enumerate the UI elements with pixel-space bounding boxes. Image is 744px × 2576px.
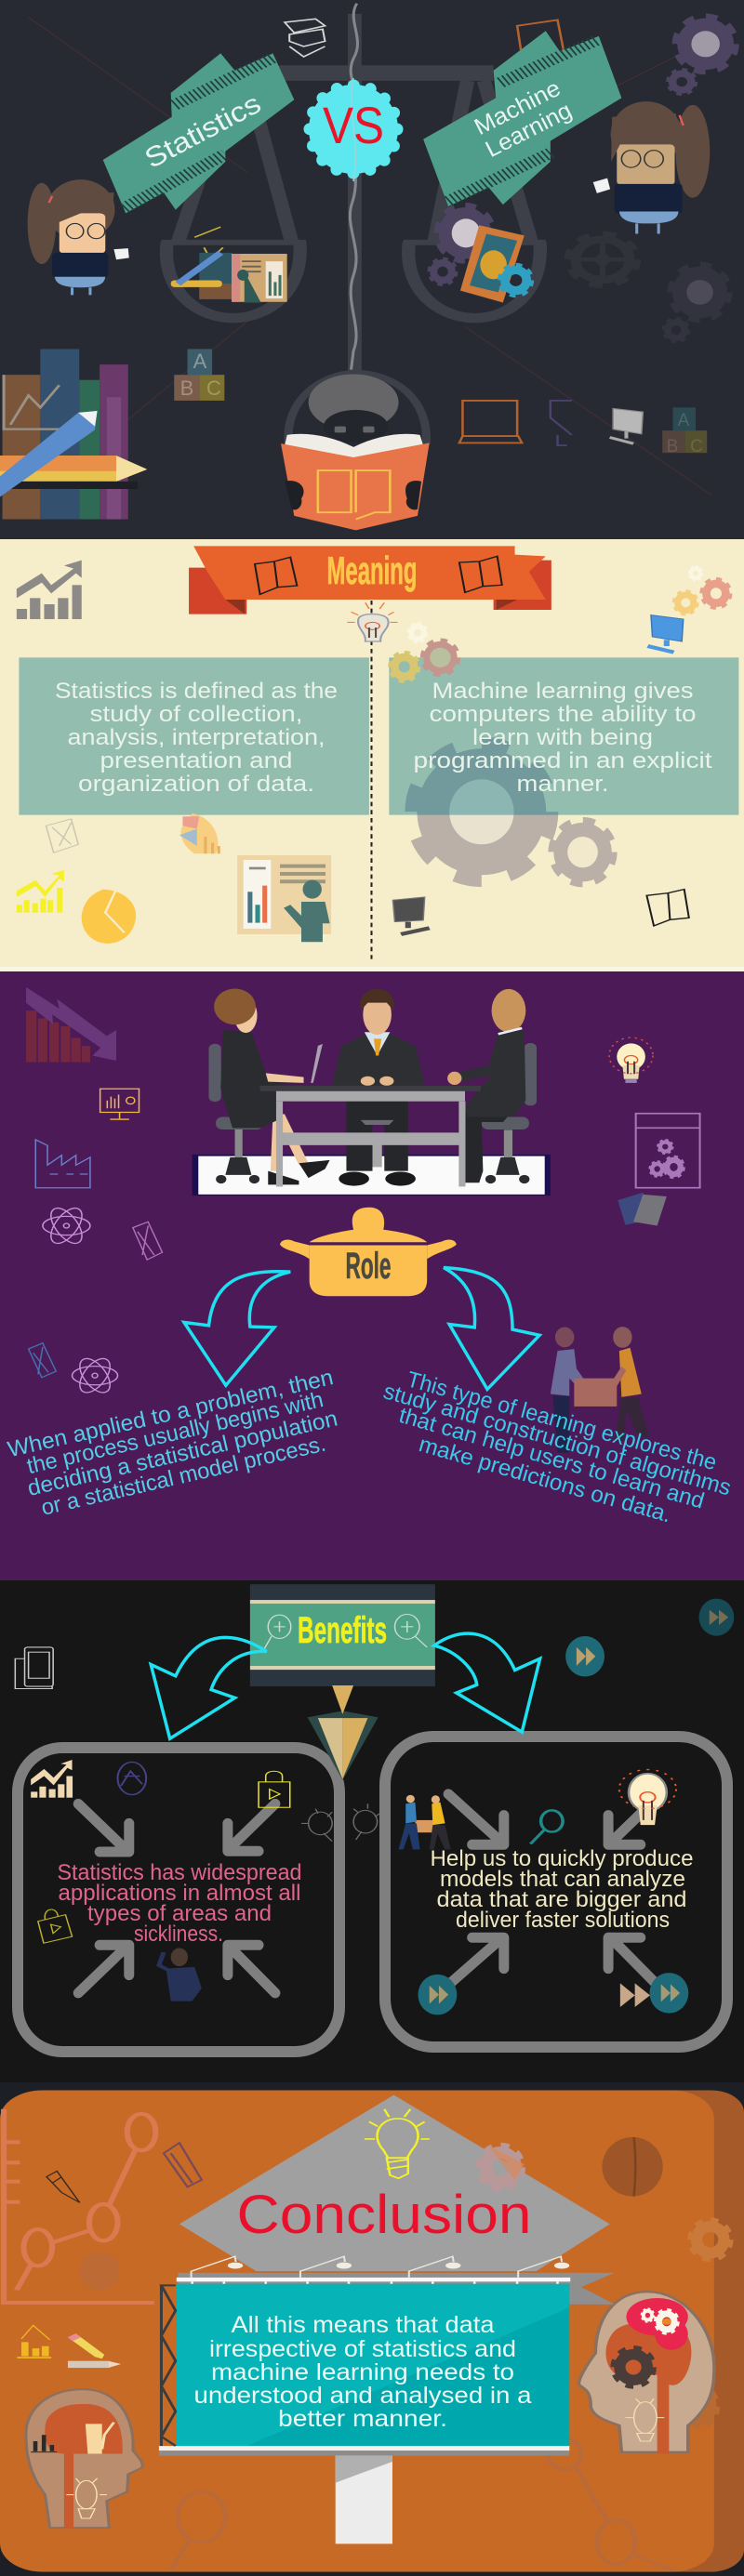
icon: left head with brain bbox=[26, 2389, 142, 2528]
heading: benefits: Benefits bbox=[298, 1610, 387, 1651]
icon: yellow chart bbox=[17, 870, 64, 913]
icon: man thinking bbox=[159, 1948, 202, 2001]
icon: lightbulb glowing bbox=[609, 1037, 653, 1083]
icon: microscope bbox=[551, 401, 572, 445]
text: conclusion: machine learning needs to bbox=[211, 2359, 514, 2385]
text: machine learning benefit: Help us to quickly produce bbox=[430, 1846, 694, 1871]
ABC letters right: B bbox=[667, 437, 678, 456]
icon: role pot bbox=[280, 1208, 457, 1296]
center man bbox=[332, 989, 425, 1186]
text: conclusion: irrespective of statistics and bbox=[209, 2336, 516, 2362]
heading: role: Role bbox=[346, 1246, 391, 1287]
text: machine learning meaning: learn with being bbox=[472, 725, 653, 750]
panel: benefits bbox=[0, 1580, 744, 2089]
ribbon label: machine: Machine bbox=[471, 75, 565, 140]
icon: banner book right bbox=[459, 556, 502, 592]
ABC letters right: C bbox=[690, 437, 703, 456]
text: machine learning meaning: Machine learning gives bbox=[432, 679, 694, 704]
icon: folders bbox=[618, 1193, 667, 1226]
icon: devices bbox=[15, 1647, 53, 1688]
icon: down chart bbox=[17, 2325, 51, 2358]
background line chart bbox=[4, 2109, 155, 2303]
conclusion artwork bbox=[0, 2090, 744, 2572]
text: statistics benefit: types of areas and bbox=[87, 1901, 272, 1926]
text: conclusion: better manner. bbox=[278, 2406, 447, 2432]
icon: lightbulb bbox=[347, 602, 398, 641]
roof diamond bbox=[179, 2095, 610, 2271]
coffee icon ellipse bbox=[602, 2137, 663, 2197]
icon: left girl bbox=[28, 179, 129, 295]
gray arrows: machine learning box bbox=[448, 1794, 658, 1985]
icon: people carrying box small bbox=[399, 1795, 451, 1849]
meeting scene bbox=[193, 989, 551, 1196]
right chair and man bbox=[447, 989, 537, 1183]
icon: gears top right bbox=[673, 566, 731, 614]
arrow: role to machine learning bbox=[444, 1268, 539, 1389]
icon: atom lower bbox=[73, 1354, 118, 1396]
icon: roof gear bbox=[478, 2146, 525, 2189]
banner: statistics ribbon bbox=[103, 53, 294, 213]
icon: blue monitor bbox=[647, 615, 684, 653]
left chair and woman bbox=[208, 989, 330, 1184]
icon: presenter board bbox=[237, 855, 331, 942]
text: machine learning benefit bbox=[430, 1846, 694, 1933]
balance scale bbox=[161, 14, 546, 443]
icon: desktop monitor bbox=[610, 408, 643, 443]
panel: statistics definition box bbox=[19, 657, 369, 815]
icon: yellow pencil bbox=[68, 2333, 121, 2368]
pointer kite bbox=[308, 1685, 379, 1780]
header artwork bbox=[0, 4, 736, 530]
faint diagonal threads bbox=[29, 17, 711, 495]
icon: dashboard monitor bbox=[100, 1089, 139, 1119]
teal screen bbox=[177, 2284, 569, 2446]
ABC letters left: B bbox=[180, 376, 193, 400]
benefits boxes bbox=[18, 1737, 727, 2052]
arrow: benefits to machine learning bbox=[434, 1633, 540, 1732]
text: statistics role: or a statistical model process. bbox=[39, 1432, 328, 1521]
white rails bbox=[177, 2278, 570, 2281]
floor bbox=[193, 1155, 551, 1196]
text: statistics role: When applied to a problem, then bbox=[6, 1365, 336, 1462]
icon: right pan contents bbox=[429, 205, 532, 303]
icon: cream chart bbox=[31, 1760, 73, 1798]
badge: vs: VS bbox=[323, 96, 384, 154]
icon: forward buttons bbox=[565, 1599, 734, 1677]
icon: dim gears bbox=[568, 234, 729, 342]
meaning artwork bbox=[17, 546, 738, 959]
text: statistics meaning: study of collection, bbox=[89, 702, 303, 727]
text: statistics benefit: applications in almost all bbox=[58, 1881, 301, 1906]
box: statistics benefit bbox=[18, 1748, 339, 2052]
gray arrows: statistics box bbox=[78, 1803, 275, 1993]
text: conclusion: understood and analysed in a bbox=[193, 2383, 532, 2409]
text: machine learning benefit: deliver faster solutions bbox=[456, 1908, 670, 1933]
text: statistics benefit: sickliness. bbox=[134, 1922, 223, 1947]
heading: meaning: Meaning bbox=[327, 548, 417, 592]
text: statistics meaning bbox=[55, 679, 338, 797]
gray flag strip bbox=[178, 2273, 615, 2305]
icon: video bag lower bbox=[38, 1909, 73, 1943]
icon: hourglass purple bbox=[133, 1222, 162, 1260]
icon: big gears bbox=[413, 745, 614, 883]
text: statistics role: deciding a statistical population bbox=[25, 1406, 340, 1501]
role artwork bbox=[26, 987, 700, 1453]
icon: purple gears bbox=[668, 17, 736, 94]
icon: abc blocks right bbox=[662, 407, 707, 453]
text: statistics meaning: presentation and bbox=[100, 748, 292, 773]
icon: gray chart arrow bbox=[17, 561, 82, 619]
icon: abc blocks left bbox=[174, 349, 224, 401]
icon: pencil outline bbox=[46, 2171, 80, 2202]
text: statistics benefit: Statistics has widespread bbox=[58, 1860, 301, 1885]
orange backdrop bbox=[0, 2090, 744, 2572]
icon: tablet outline bbox=[517, 20, 564, 57]
text: machine learning role: that can help users to learn and bbox=[396, 1403, 707, 1514]
truss bbox=[161, 2285, 176, 2446]
icon: people carrying box bbox=[551, 1327, 649, 1453]
ribbon label: learning: Learning bbox=[482, 98, 576, 163]
icon: left pan contents bbox=[171, 227, 287, 303]
text: machine learning meaning bbox=[413, 679, 712, 797]
icon: right head with brain bbox=[578, 2292, 714, 2454]
billboard bbox=[159, 2256, 615, 2543]
text: conclusion: All this means that data bbox=[231, 2312, 495, 2338]
arrow: benefits to statistics bbox=[151, 1637, 267, 1738]
icon: pie chart bbox=[179, 813, 220, 853]
panel: header statistics vs machine learning bbox=[0, 0, 744, 539]
text: machine learning benefit: data that are bigger and bbox=[437, 1887, 686, 1912]
icon: bar stack with pencils bbox=[0, 349, 147, 520]
icon: forward buttons lower bbox=[418, 1973, 688, 2015]
icon: right girl bbox=[593, 101, 710, 234]
icon: atom top bbox=[43, 1204, 90, 1248]
arrow: role to statistics bbox=[184, 1272, 290, 1385]
sign: benefits board bbox=[250, 1584, 435, 1686]
box: machine learning benefit bbox=[385, 1737, 727, 2047]
lamps bbox=[192, 2256, 569, 2278]
icon: laptop outline bbox=[459, 401, 522, 443]
ABC letters right: A bbox=[678, 411, 690, 430]
panel: conclusion bbox=[0, 2082, 744, 2576]
text: statistics meaning: organization of data. bbox=[78, 772, 314, 797]
text: machine learning meaning: manner. bbox=[517, 772, 608, 797]
icon: gears above ml box bbox=[390, 623, 458, 681]
text: machine learning role: study and construction of algorithms bbox=[380, 1379, 734, 1500]
text: statistics role: the process usually begins with bbox=[24, 1387, 326, 1479]
text: statistics meaning: analysis, interpretation, bbox=[67, 725, 326, 750]
text: machine learning meaning: programmed in an explicit bbox=[413, 748, 712, 773]
text: machine learning meaning: computers the ability to bbox=[430, 702, 696, 727]
table bbox=[260, 1086, 481, 1186]
ABC letters left bbox=[180, 350, 221, 400]
text: machine learning benefit: models that can analyze bbox=[440, 1867, 685, 1892]
icon: hourglass blue bbox=[29, 1343, 56, 1378]
badge: vs bbox=[309, 78, 398, 181]
icon: dark monitor bbox=[392, 897, 430, 934]
icon: falling chart bbox=[26, 987, 116, 1063]
icon: settings window bbox=[636, 1114, 700, 1188]
text: statistics role bbox=[6, 1365, 340, 1521]
icon: outline bulbs bbox=[301, 1803, 379, 1842]
text: machine learning role: This type of learning explores the bbox=[405, 1367, 719, 1475]
icon: video bags bbox=[259, 1771, 290, 1807]
heading banner ribbon bbox=[189, 546, 551, 614]
heading: conclusion: Conclusion bbox=[236, 2185, 532, 2245]
text: statistics meaning: Statistics is defined as the bbox=[55, 679, 338, 704]
text: machine learning role: make predictions on data. bbox=[416, 1432, 674, 1527]
ABC letters right bbox=[667, 411, 703, 456]
post bbox=[336, 2456, 392, 2543]
faint gears bbox=[80, 2220, 731, 2426]
panel: ml definition box bbox=[389, 657, 738, 815]
dashed divider bbox=[369, 601, 373, 959]
icon: teal magnifier bbox=[530, 1810, 563, 1844]
panel: role bbox=[0, 971, 744, 1580]
icon: orange pie bbox=[82, 890, 136, 944]
icon: black book bbox=[646, 890, 689, 926]
text: conclusion bbox=[193, 2312, 532, 2432]
icon: hourglass bbox=[46, 819, 78, 852]
icon: blue circle bbox=[118, 1762, 146, 1795]
benefits artwork bbox=[15, 1584, 734, 2015]
faint lower right chart bbox=[171, 2438, 673, 2570]
ABC letters left: A bbox=[193, 350, 207, 373]
ribbon label: statistics: Statistics bbox=[140, 88, 266, 175]
text: statistics benefit bbox=[58, 1860, 301, 1947]
icon: ruler and pencil bbox=[164, 2143, 202, 2186]
icon: big bulb bbox=[619, 1770, 676, 1825]
icon: books stack bbox=[285, 19, 325, 57]
panel: meaning bbox=[0, 539, 744, 971]
icon: reader with book bbox=[281, 374, 430, 530]
ABC letters left: C bbox=[206, 376, 221, 400]
icon: yellow bulb bbox=[365, 2109, 430, 2178]
icon: banner book left bbox=[255, 557, 297, 594]
icon: factory bbox=[35, 1140, 90, 1188]
banner: machine learning ribbon bbox=[423, 31, 621, 206]
